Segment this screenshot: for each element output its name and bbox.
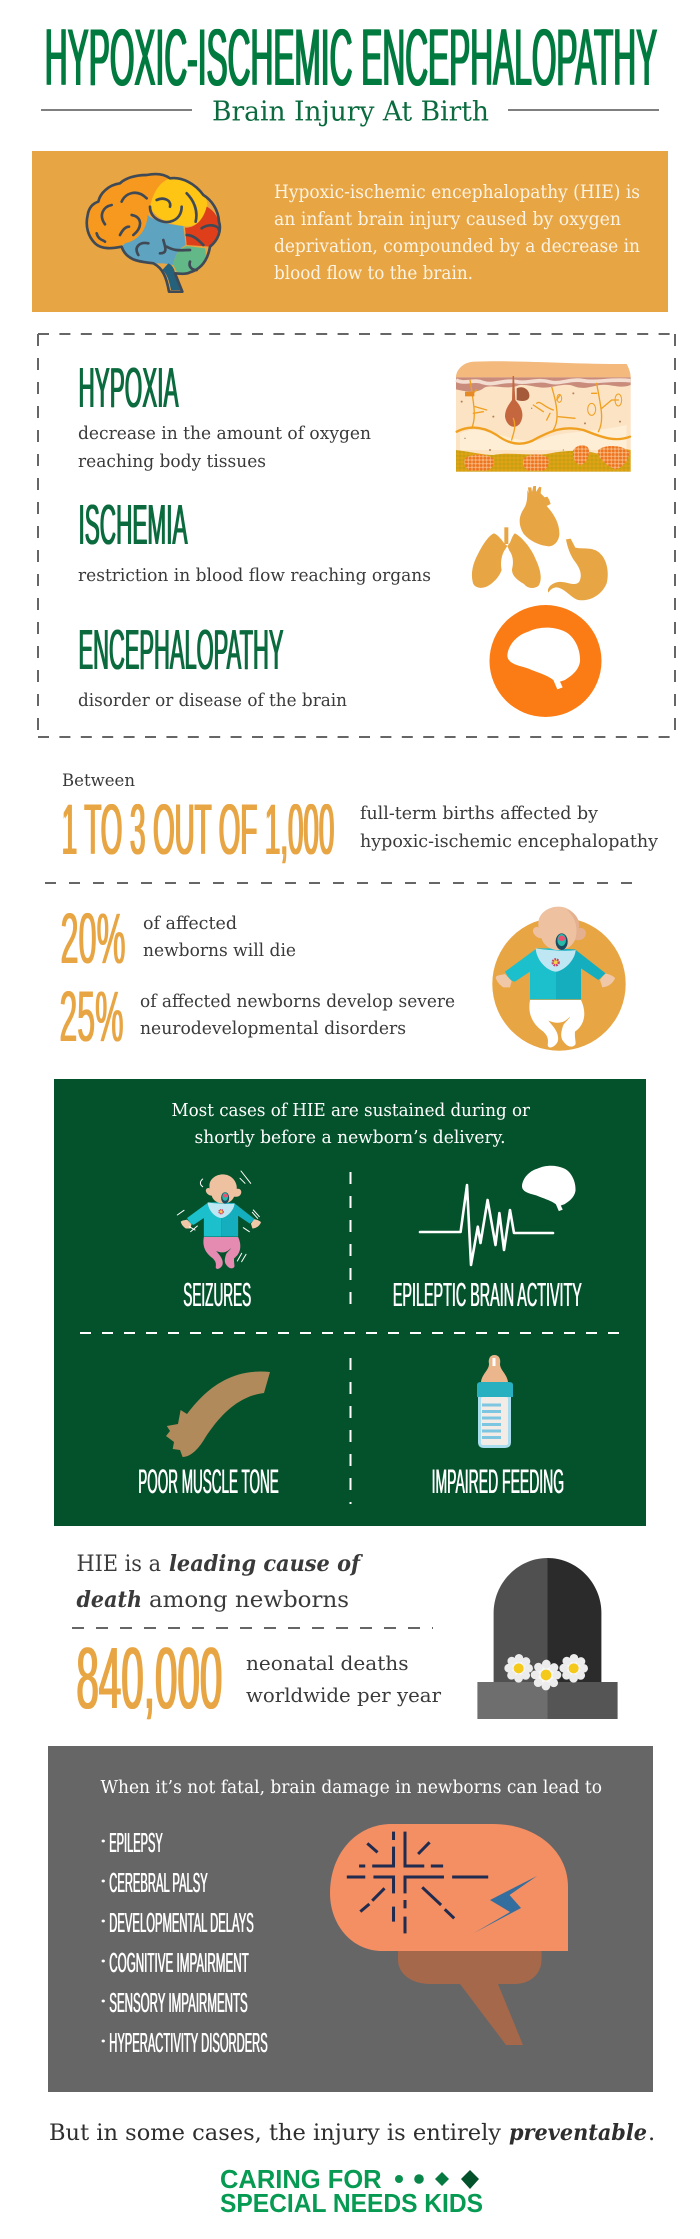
- panel: intro: deprivation, compounded by a decrease in: [274, 236, 640, 257]
- text: hypoxia definition: reaching body tissues: [78, 451, 266, 472]
- stat: 20 percent: 20%: [60, 900, 125, 979]
- icon: tombstone with flowers: [477, 1558, 618, 1719]
- subtitle with rules: Brain Injury At Birth: [212, 96, 489, 128]
- list: outcomes: EPILEPSY: [109, 1827, 163, 1858]
- panel: intro: an infant brain injury caused by oxygen: [274, 209, 621, 230]
- panel: outcomes: COGNITIVE IMPAIRMENT: [109, 1947, 248, 1978]
- text: panel intro: Most cases of HIE are sustained during or: [172, 1100, 530, 1121]
- stat: 840,000: worldwide per year: [246, 1683, 441, 1707]
- stat: 1 to 3 out of 1,000: Between: [62, 771, 135, 790]
- panel: symptoms: [54, 1079, 646, 1526]
- logo: caring for special needs kids: [220, 2164, 483, 2218]
- text: panel intro: [172, 1100, 530, 1148]
- stat: 20 percent: of affected: [143, 913, 237, 934]
- logo: caring for special needs kids: SPECIAL NEEDS KIDS: [220, 2188, 483, 2218]
- closing line: preventable: [509, 2120, 647, 2146]
- panel: outcomes: DEVELOPMENTAL DELAYS: [109, 1907, 254, 1938]
- text: hypoxia definition: decrease in the amount of oxygen: [78, 423, 371, 444]
- panel: intro: blood flow to the brain.: [274, 263, 473, 284]
- panel: definitions: ENCEPHALOPATHY: [78, 618, 283, 682]
- text: leading cause of death: among newborns: [149, 1587, 349, 1613]
- closing line: .: [648, 2120, 655, 2146]
- icon: eeg and brain: [420, 1166, 576, 1265]
- text: leading cause of death: [76, 1551, 363, 1613]
- text: hypoxia definition: [78, 423, 371, 472]
- stat: 1 to 3 out of 1,000: full-term births affected by: [360, 803, 599, 824]
- panel: intro: [32, 151, 668, 312]
- panel: outcomes: SENSORY IMPAIRMENTS: [109, 1987, 248, 2018]
- stat: 20 percent: [60, 900, 296, 979]
- stat: 25 percent: 25%: [59, 978, 123, 1057]
- icon: brain in orange circle: [490, 605, 602, 717]
- icon: baby in circle: [492, 907, 626, 1051]
- icon: limp arm: [166, 1372, 270, 1457]
- panel: outcomes: [48, 1746, 653, 2092]
- panel: symptoms: SEIZURES: [183, 1277, 251, 1314]
- closing line: But in some cases, the injury is entirely: [49, 2120, 501, 2146]
- list: outcomes: [102, 1827, 267, 2058]
- panel: definitions: ISCHEMIA: [78, 493, 187, 557]
- text: leading cause of death: leading cause of: [169, 1551, 363, 1577]
- text: panel intro: shortly before a newborn’s delivery.: [194, 1127, 506, 1148]
- stat: 840,000: 840,000: [76, 1630, 222, 1727]
- panel: symptoms: POOR MUSCLE TONE: [138, 1463, 278, 1501]
- panel: intro: Hypoxic-ischemic encephalopathy (HIE) is: [274, 182, 640, 203]
- stat: 25 percent: of affected newborns develop severe: [140, 991, 455, 1012]
- panel: definitions: HYPOXIA: [78, 356, 178, 420]
- icon: coloured brain: [87, 174, 220, 292]
- panel: definitions: [38, 334, 675, 737]
- logo: caring for special needs kids: CARING FOR: [220, 2164, 382, 2194]
- stat: 25 percent: [59, 978, 455, 1057]
- icon: damaged brain: [330, 1824, 568, 2045]
- icon: skin cross-section: [456, 361, 631, 472]
- stat: 840,000: neonatal deaths: [246, 1651, 408, 1675]
- panel: outcomes: HYPERACTIVITY DISORDERS: [109, 2027, 268, 2058]
- text: outcomes intro: When it’s not fatal, brain damage in newborns can lead to: [100, 1778, 602, 1798]
- icon: seizing baby: [177, 1171, 261, 1269]
- stat: 25 percent: neurodevelopmental disorders: [140, 1018, 406, 1039]
- text: encephalopathy definition: disorder or disease of the brain: [78, 690, 347, 711]
- text: leading cause of death: HIE is a: [76, 1551, 161, 1577]
- stat: 1 to 3 out of 1,000: hypoxic-ischemic encephalopathy: [360, 831, 659, 852]
- list: outcomes: CEREBRAL PALSY: [109, 1867, 208, 1898]
- icon: baby bottle: [477, 1355, 513, 1448]
- stat: 20 percent: newborns will die: [143, 940, 296, 961]
- icon: heart lungs stomach: [472, 486, 608, 600]
- text: ischemia definition: restriction in blood flow reaching organs: [78, 565, 431, 586]
- text: leading cause of death: death: [76, 1587, 142, 1613]
